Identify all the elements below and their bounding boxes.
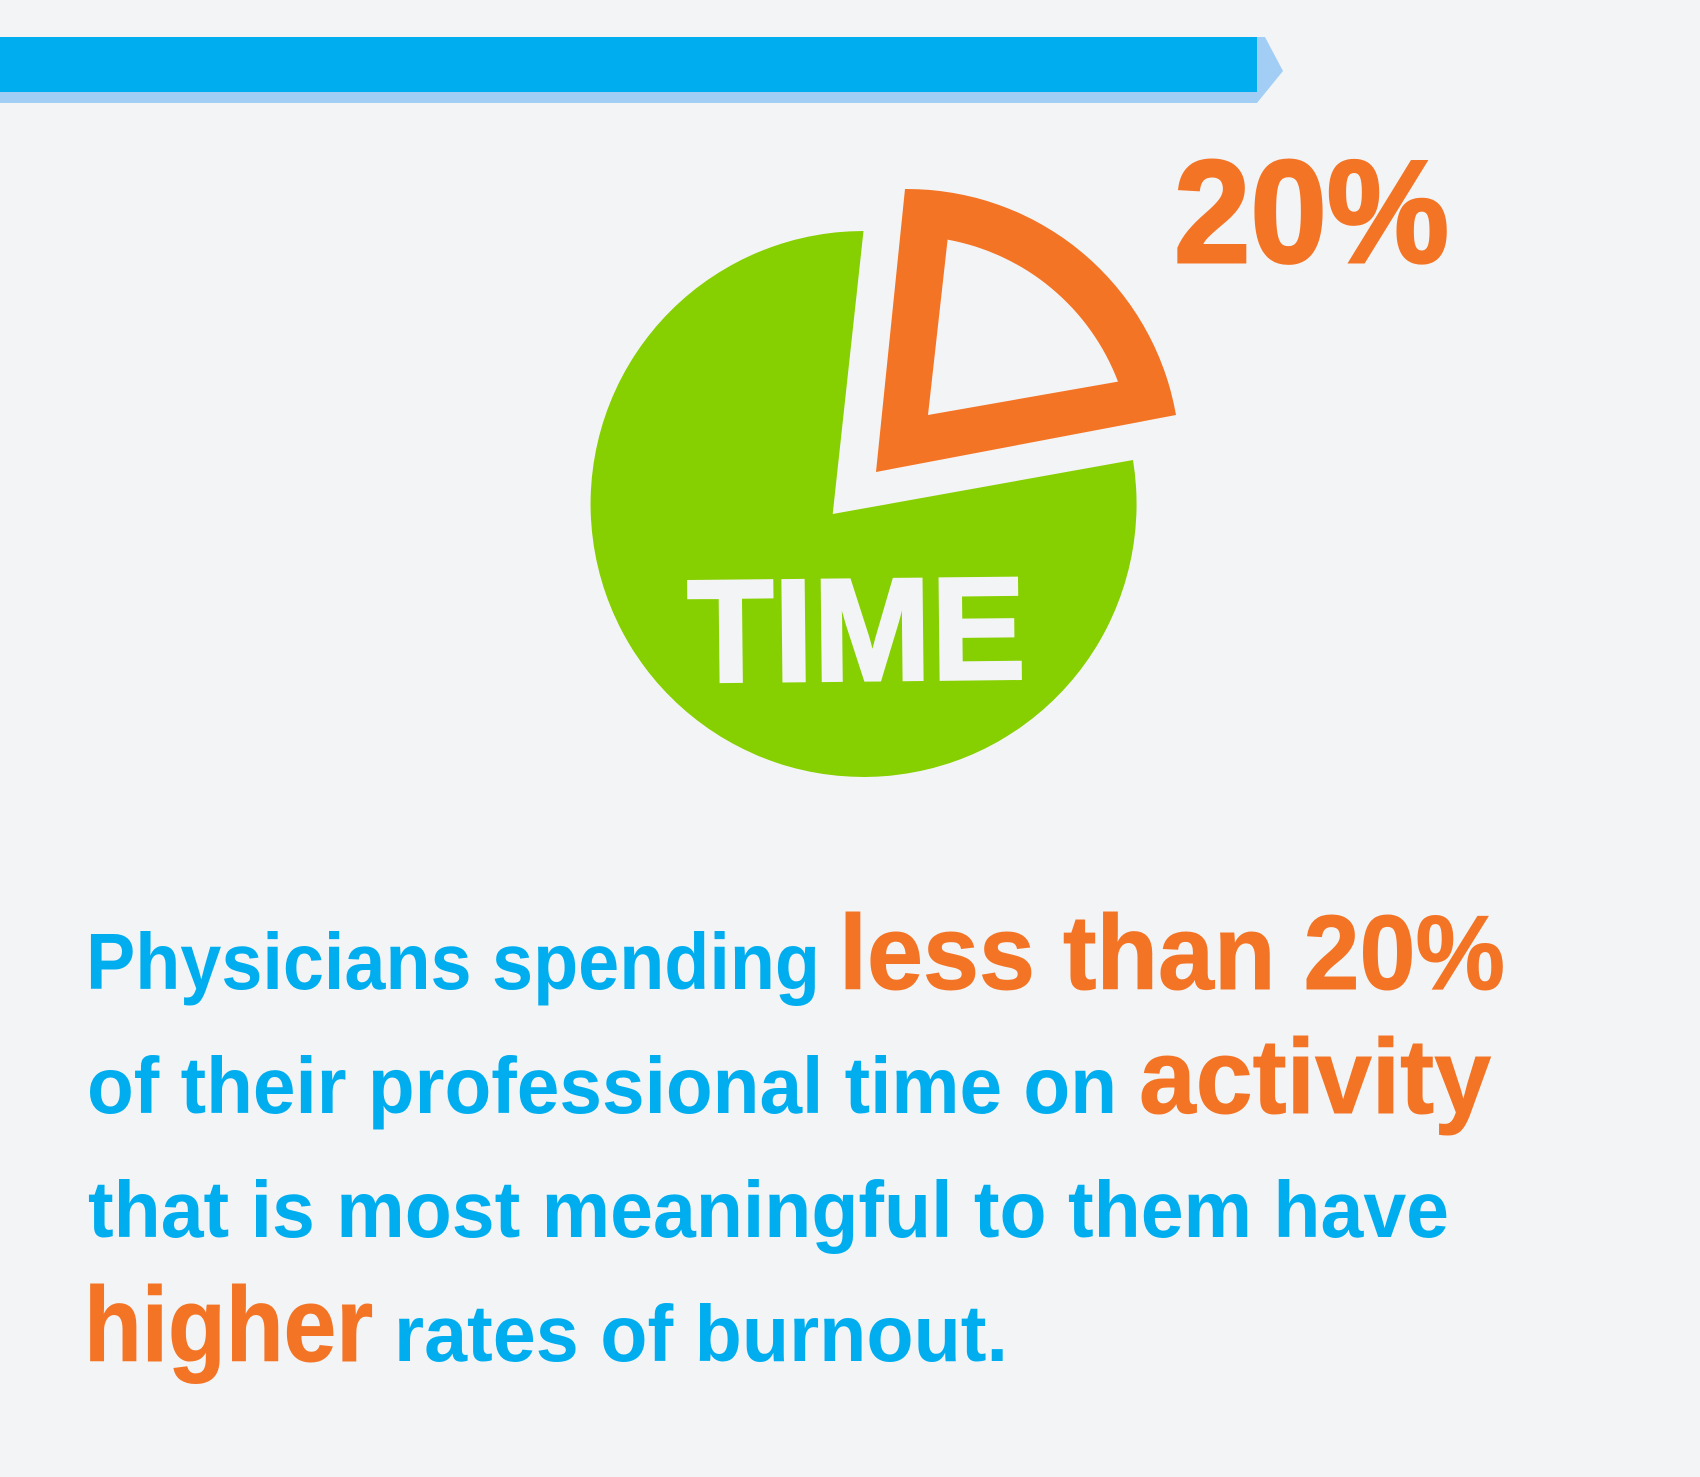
- line 2: activity: [1139, 1018, 1491, 1136]
- line 3: that is most meaningful to them have: [88, 1165, 1449, 1254]
- statement text: [84, 894, 1505, 1384]
- line 1: [86, 894, 1505, 1012]
- line 2: of their professional time on: [87, 1041, 1117, 1130]
- orange outlined 20% slice: [876, 189, 1176, 472]
- line 4: [84, 1266, 1008, 1384]
- line 2: [87, 1018, 1491, 1136]
- green pie remainder: [591, 231, 1137, 777]
- pie chart: time share: [591, 189, 1176, 777]
- line 1: Physicians spending: [86, 917, 820, 1006]
- line 4: rates of burnout.: [394, 1289, 1008, 1378]
- line 4: higher: [84, 1266, 373, 1384]
- top arrow banner: [0, 37, 1283, 103]
- 20% figure: 20%: [1174, 130, 1449, 293]
- pie label TIME: TIME: [687, 546, 1026, 713]
- line 1: less than 20%: [839, 894, 1505, 1012]
